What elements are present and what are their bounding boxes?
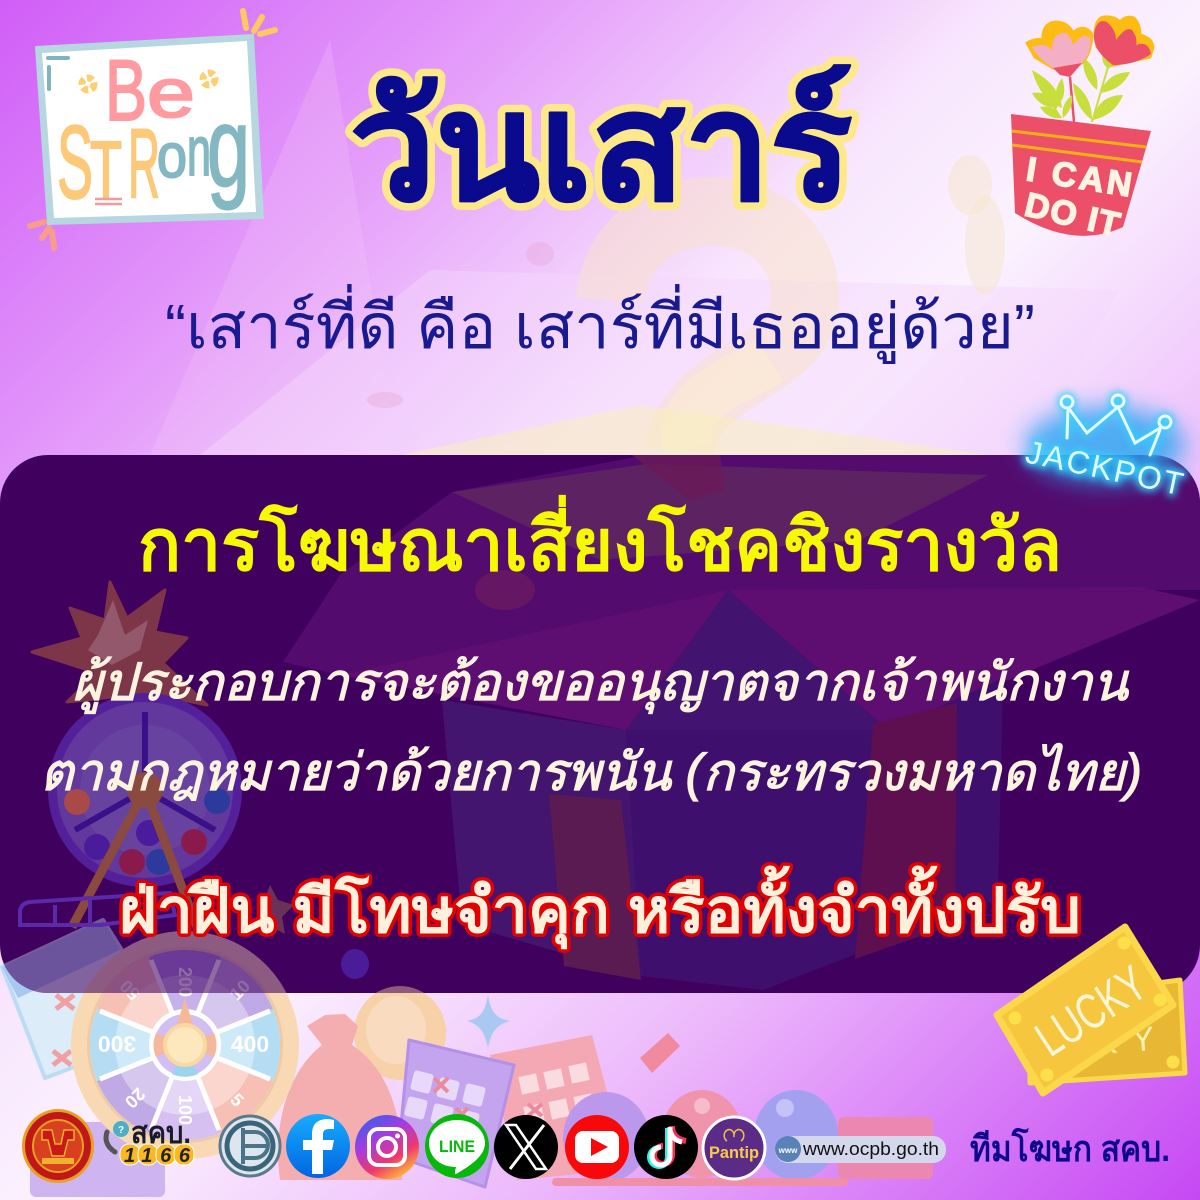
icon: jackpot neon sign: JACKPOT bbox=[1023, 434, 1187, 502]
website pill: www.ocpb.go.th bbox=[802, 1138, 939, 1159]
panel art: lottery drum bbox=[48, 693, 242, 927]
background art: lottery items and wheel bbox=[2, 920, 933, 1197]
title: วันเสาร์ bbox=[350, 63, 852, 231]
icon: ocpb seal bbox=[22, 1109, 94, 1183]
panel art: small star bbox=[255, 885, 294, 934]
background art: lottery items and wheel: 300 bbox=[98, 1031, 136, 1057]
background art: lottery items and wheel: 10 bbox=[226, 976, 254, 1004]
icon: be strong sticker: o bbox=[157, 122, 187, 191]
icon: youtube bbox=[565, 1115, 629, 1179]
icon: x bbox=[494, 1115, 558, 1179]
icon: lucky ticket: LUCKY bbox=[1025, 955, 1157, 1067]
background art: lottery items and wheel: 50 bbox=[116, 976, 144, 1004]
icon: lucky ticket: KY bbox=[1093, 1020, 1155, 1062]
background art: lottery items and wheel: 200 bbox=[175, 967, 195, 997]
icon: be strong sticker: e bbox=[147, 54, 195, 132]
body line 2: ตามกฎหมายว่าด้วยการพนัน (กระทรวงมหาดไทย) bbox=[40, 743, 1142, 802]
penalty warning: ฝ่าฝืน มีโทษจำคุก หรือทั้งจำทั้งปรับ bbox=[119, 865, 1081, 949]
background art: lottery items and wheel: 400 bbox=[231, 1031, 269, 1057]
icon: hotline 1166: 1166 bbox=[124, 1145, 191, 1167]
icon: hotline 1166: สคบ. bbox=[131, 1117, 191, 1150]
panel art: ball bbox=[341, 949, 369, 979]
icon: cpe logo bbox=[220, 1116, 280, 1176]
icon: jackpot neon sign: JACKPOT bbox=[1023, 434, 1187, 502]
icon: facebook bbox=[286, 1114, 350, 1178]
subtitle quote: “เสาร์ที่ดี คือ เสาร์ที่มีเธออยู่ด้วย” bbox=[165, 284, 1035, 364]
panel art: wheel and ticket seen through bbox=[4, 918, 424, 993]
main dark panel bbox=[0, 455, 1200, 993]
background art: lottery items and wheel: 20 bbox=[121, 1084, 149, 1112]
body line 1: ผู้ประกอบการจะต้องขออนุญาตจากเจ้าพนักงาน bbox=[72, 654, 1129, 714]
panel art: film strip bbox=[20, 893, 175, 925]
footer logo row bbox=[22, 1109, 946, 1183]
icon: be strong sticker: R bbox=[128, 108, 160, 218]
website pill: www bbox=[778, 1146, 798, 1155]
icon: lucky ticket bbox=[997, 927, 1185, 1093]
panel art: upper gift lid bbox=[283, 455, 1200, 990]
title: วันเสาร์ bbox=[350, 63, 852, 231]
icon: be strong sticker: n bbox=[187, 112, 211, 190]
background art: lottery items and wheel: 5 bbox=[226, 1089, 248, 1111]
icon: pantip: Pantip bbox=[709, 1143, 759, 1162]
icon: line: LINE bbox=[439, 1137, 475, 1156]
background art: question mark gift bbox=[150, 40, 1120, 455]
icon: jackpot neon sign bbox=[1023, 395, 1187, 502]
icon: be strong sticker bbox=[30, 11, 275, 248]
background art: lottery items and wheel: 100 bbox=[175, 1095, 195, 1125]
icon: flower pot i can do it bbox=[1011, 17, 1153, 244]
icon: be strong sticker: B bbox=[105, 43, 147, 139]
icon: flower pot i can do it: DO IT bbox=[1021, 186, 1124, 244]
team credit: ทีมโฆษก สคบ. bbox=[970, 1127, 1170, 1169]
icon: tiktok bbox=[634, 1115, 698, 1179]
icon: be strong sticker: S bbox=[57, 105, 93, 221]
icon: flower pot i can do it: I CAN bbox=[1024, 150, 1134, 204]
icon: line bbox=[425, 1114, 489, 1178]
icon: pantip bbox=[703, 1117, 765, 1179]
icon: hotline 1166 bbox=[106, 1117, 194, 1167]
panel art: star burst bbox=[32, 582, 207, 705]
icon: instagram bbox=[355, 1115, 419, 1179]
icon: be strong sticker: g bbox=[207, 84, 250, 210]
panel heading: การโฆษณาเสี่ยงโชคชิงรางวัล bbox=[138, 494, 1062, 586]
website pill bbox=[775, 1136, 946, 1163]
icon: hotline 1166: ? bbox=[118, 1125, 124, 1136]
icon: be strong sticker: T bbox=[90, 125, 122, 214]
